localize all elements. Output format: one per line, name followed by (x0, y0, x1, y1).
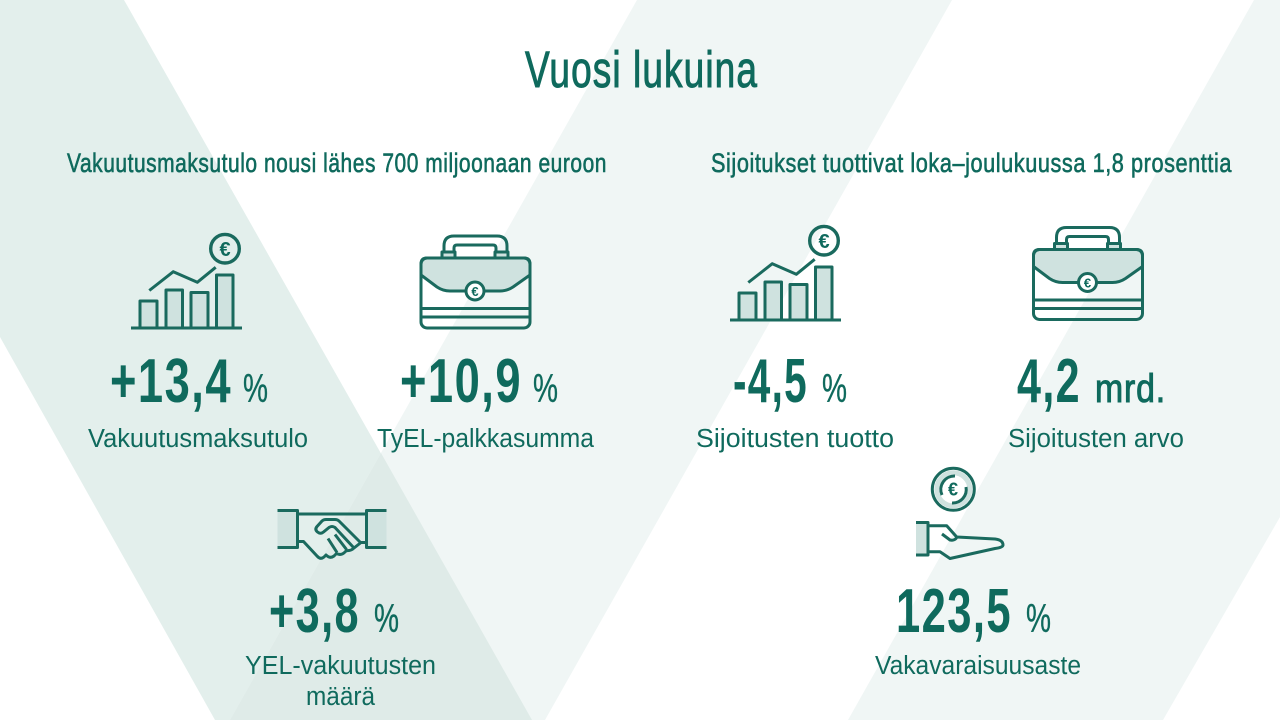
icon: briefcase, investments: € (1084, 276, 1091, 290)
icon: hand with coin: € (948, 480, 958, 500)
metric: investment return: Sijoitusten tuotto (696, 425, 894, 453)
icon: handshake (278, 510, 386, 558)
metric: YEL policies: määrä (306, 683, 376, 711)
heading: premium income: Vakuutusmaksutulo nousi lähes 700 miljoonaan euroon (67, 148, 607, 178)
metric: solvency ratio (875, 577, 1081, 680)
metric: YEL policies (245, 577, 436, 711)
icon: hand with coin (916, 468, 1003, 558)
metric: investment value: Sijoitusten arvo (1008, 425, 1184, 453)
metric: payroll: % (533, 367, 558, 411)
icon: growth chart with euro coin, investments: € (818, 231, 830, 253)
metric: payroll (377, 347, 595, 453)
icon: growth chart with euro coin: € (219, 239, 231, 261)
icon: briefcase (421, 236, 530, 328)
metric: solvency ratio: Vakavaraisuusaste (875, 652, 1081, 680)
metric: investment return: % (822, 367, 847, 411)
icon: briefcase, investments (1034, 228, 1142, 320)
metric: investment return: -4,5 (733, 347, 808, 416)
metric: investment value (1008, 347, 1184, 453)
icon: growth chart with euro coin (131, 234, 242, 328)
metric: payroll: TyEL-palkkasumma (377, 425, 595, 453)
icon: growth chart with euro coin, investments (730, 226, 841, 320)
metric: solvency ratio: 123,5 (896, 577, 1012, 646)
title: Vuosi lukuina (525, 41, 758, 98)
metric: YEL policies: % (374, 597, 399, 641)
metric: solvency ratio: % (1026, 597, 1051, 641)
metric: investment value: mrd. (1095, 367, 1166, 411)
metric: premium income: Vakuutusmaksutulo (88, 425, 308, 453)
metric: investment value: 4,2 (1017, 347, 1081, 416)
metric: premium income: +13,4 (110, 347, 232, 416)
metric: premium income: % (243, 367, 268, 411)
metric: premium income (88, 347, 308, 453)
metric: YEL policies: YEL-vakuutusten (245, 652, 436, 680)
metric: investment return (696, 347, 894, 453)
metric: payroll: +10,9 (400, 347, 522, 416)
icon: briefcase: € (471, 284, 479, 299)
metric: YEL policies: +3,8 (269, 577, 360, 646)
